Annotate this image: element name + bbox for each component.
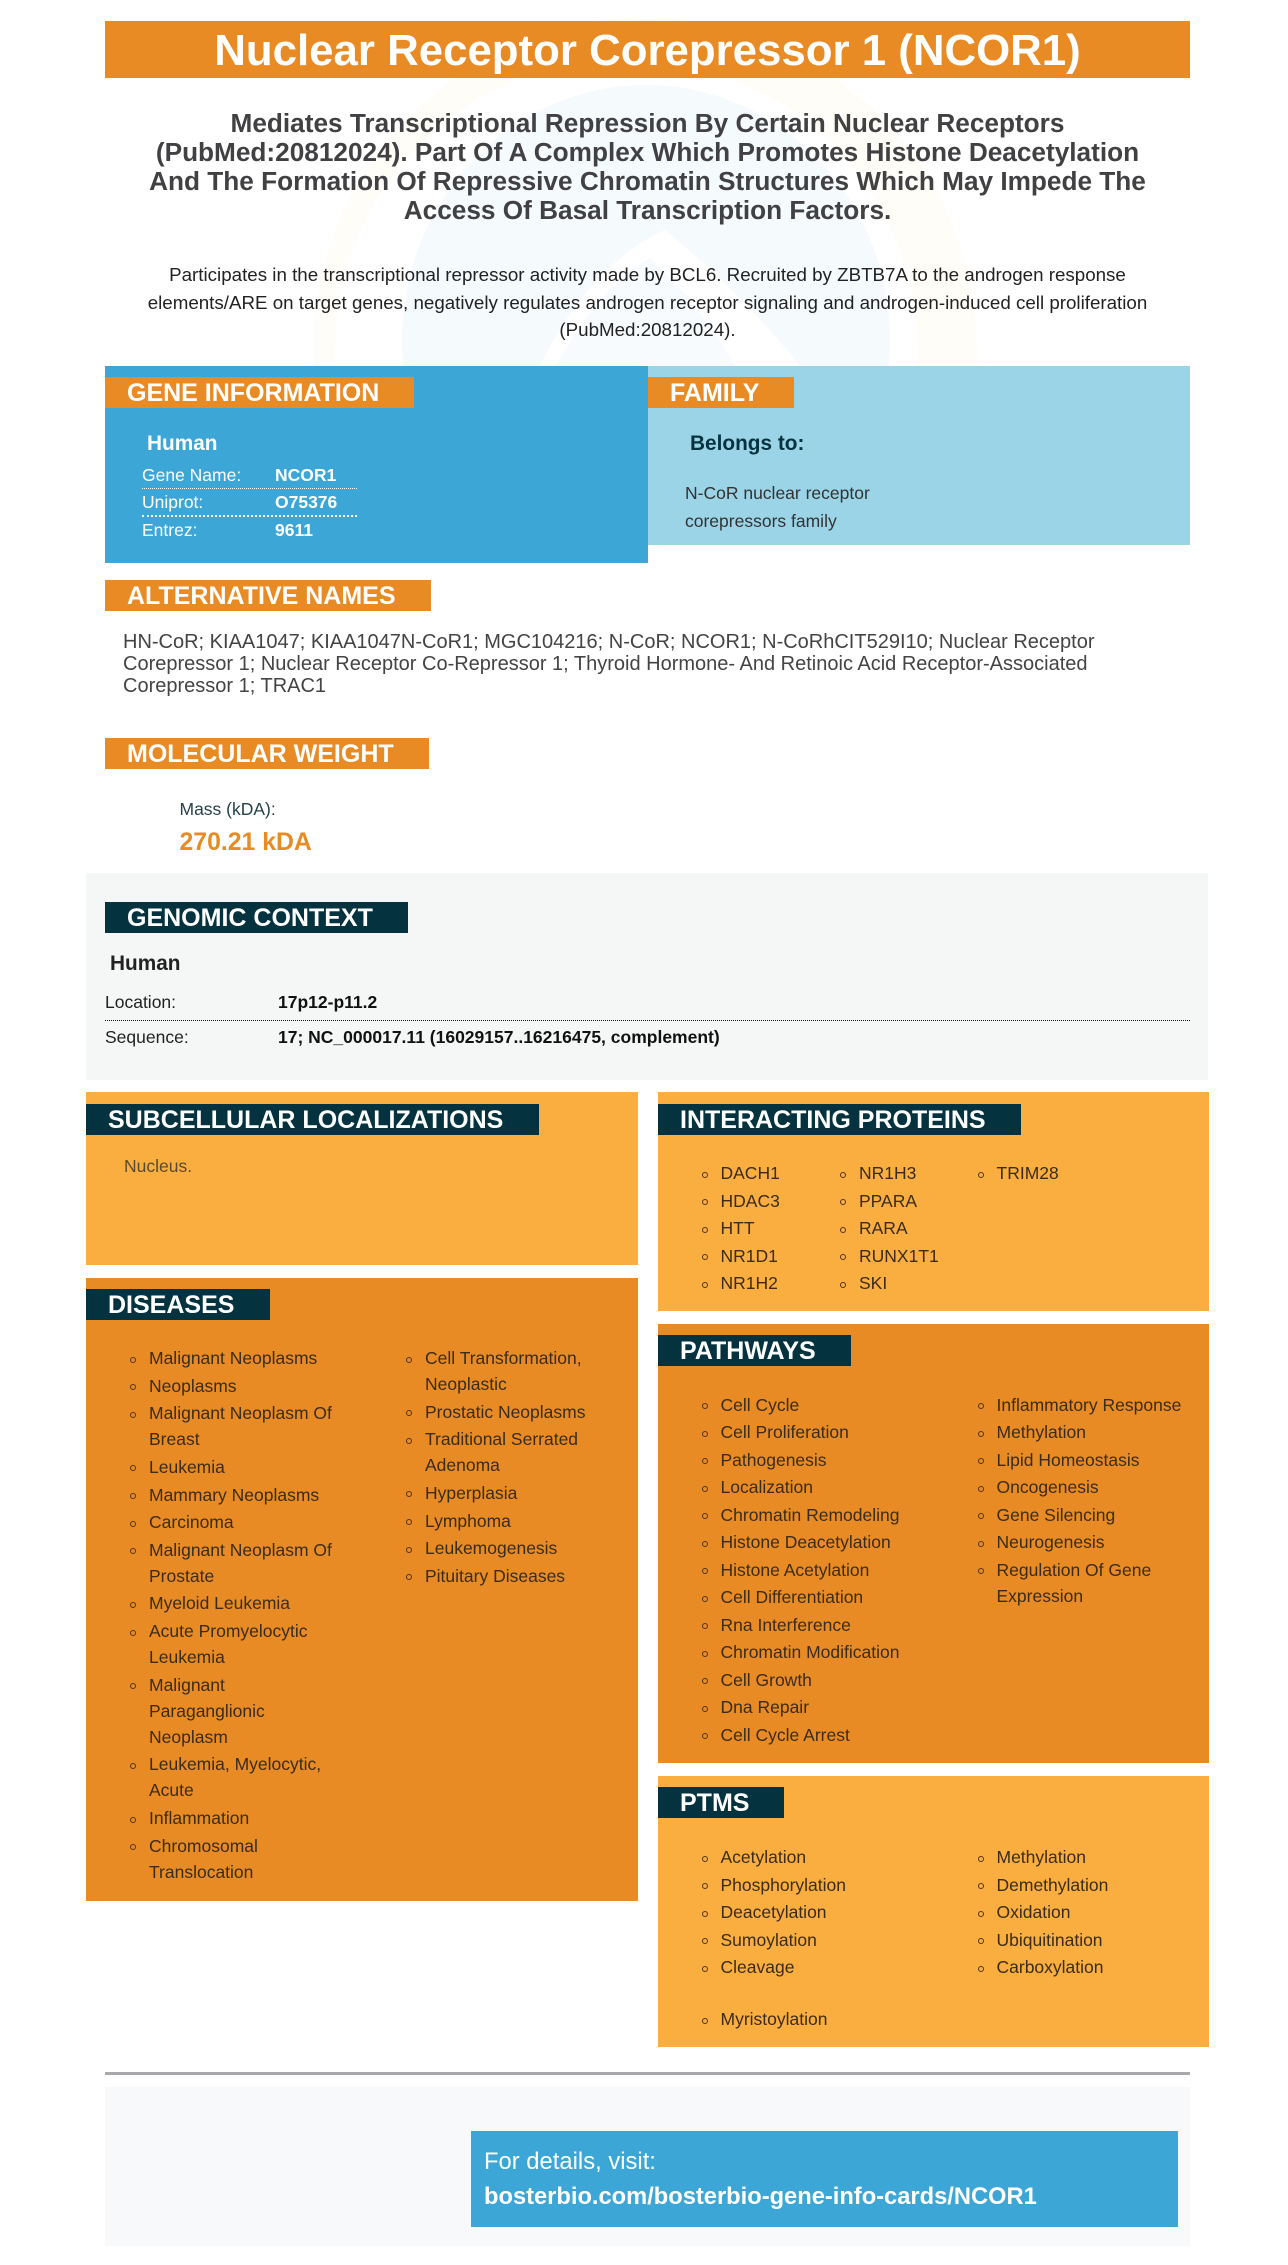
panel: pathways — [658, 1324, 1209, 1763]
list: diseases column 1: Malignant Neoplasms — [149, 1348, 317, 1368]
panel: diseases — [86, 1278, 638, 1901]
list: diseases column 1: Malignant Neoplasm Of — [149, 1540, 332, 1560]
list: ptms column 2: Oxidation — [996, 1902, 1070, 1922]
row: uniprot: O75376 — [275, 492, 337, 512]
localization text: Nucleus. — [124, 1156, 192, 1176]
species label: Human — [110, 952, 180, 975]
panel: gene information — [105, 366, 648, 563]
list: pathways column 2 — [978, 1394, 1181, 1606]
list: pathways column 2: Expression — [996, 1586, 1083, 1606]
list: diseases column 1 — [130, 1348, 332, 1882]
description: elements/ARE on target genes, negatively regulates androgen receptor signaling and androgen-induced cell proliferation — [148, 292, 1147, 313]
mass label: Mass (kDA): — [180, 799, 276, 819]
title banner: Nuclear Receptor Corepressor 1 (NCOR1) — [214, 26, 1081, 75]
list: diseases column 2: Leukemogenesis — [425, 1538, 557, 1558]
list: pathways column 1: Dna Repair — [720, 1697, 809, 1717]
list: pathways column 2: Regulation Of Gene — [996, 1560, 1151, 1580]
heading: subcellular localizations: SUBCELLULAR LOCALIZATIONS — [108, 1106, 503, 1134]
list: ptms column 1: Phosphorylation — [720, 1874, 846, 1894]
list: diseases column 2: Neoplastic — [425, 1374, 507, 1394]
subtitle: Access Of Basal Transcription Factors. — [404, 195, 891, 225]
heading: gene information: GENE INFORMATION — [127, 379, 379, 407]
callout url: bosterbio.com/bosterbio-gene-info-cards/NCOR1 — [484, 2184, 1037, 2210]
row: sequence: 17; NC_000017.11 (16029157..16216475, complement) — [278, 1027, 720, 1047]
belongs to label: Belongs to: — [690, 432, 804, 455]
heading: diseases: DISEASES — [108, 1291, 234, 1319]
list: diseases column 1: Breast — [149, 1429, 200, 1449]
heading: diseases — [86, 1289, 270, 1320]
alternative names text: HN-CoR; KIAA1047; KIAA1047N-CoR1; MGC104216; N-CoR; NCOR1; N-CoRhCIT529I10; Nuclear Receptor — [123, 631, 1094, 653]
list: proteins column 2: RARA — [859, 1218, 908, 1238]
list: proteins column 3: TRIM28 — [996, 1163, 1059, 1183]
heading: ptms — [658, 1787, 784, 1818]
row: uniprot: Uniprot: — [142, 492, 203, 512]
row: gene name: NCOR1 — [275, 465, 336, 485]
list: pathways column 1: Chromatin Modification — [720, 1642, 899, 1662]
mass value: 270.21 kDA — [180, 829, 312, 856]
description: (PubMed:20812024). — [559, 319, 736, 340]
list: ptms column 1: Cleavage — [720, 1957, 794, 1977]
callout: details link — [471, 2131, 1178, 2227]
list: proteins column 2 — [840, 1163, 939, 1293]
list: ptms column 1: Acetylation — [720, 1847, 806, 1867]
list: diseases column 1: Translocation — [149, 1862, 253, 1882]
list: ptms column 1 — [702, 1847, 846, 1977]
list: pathways column 1: Pathogenesis — [720, 1450, 827, 1470]
list: ptms column 2: Demethylation — [996, 1874, 1108, 1894]
list: pathways column 1: Cell Proliferation — [720, 1422, 849, 1442]
row: entrez: 9611 — [275, 520, 313, 540]
species label: Human — [147, 432, 217, 455]
panel: interacting proteins — [658, 1092, 1209, 1311]
list: pathways column 1: Cell Growth — [720, 1670, 812, 1690]
list: diseases column 2: Pituitary Diseases — [425, 1566, 565, 1586]
list: pathways column 2: Oncogenesis — [996, 1477, 1099, 1497]
list: diseases column 1: Acute Promyelocytic — [149, 1621, 308, 1641]
list: ptms column 2: Ubiquitination — [996, 1930, 1103, 1950]
list: diseases column 1: Paraganglionic — [149, 1701, 265, 1721]
list: ptms column 2: Methylation — [996, 1847, 1086, 1867]
list: diseases column 2: Prostatic Neoplasms — [425, 1402, 585, 1422]
list: pathways column 2: Lipid Homeostasis — [996, 1450, 1139, 1470]
row: location: Location: — [105, 992, 176, 1012]
list: ptms overflow item: Myristoylation — [720, 2009, 827, 2029]
list: proteins column 1 — [702, 1163, 780, 1293]
list: proteins column 1: NR1H2 — [720, 1273, 778, 1293]
description: Participates in the transcriptional repressor activity made by BCL6. Recruited by ZBTB7A to the androgen response — [169, 264, 1126, 285]
alternative names text: Corepressor 1; Nuclear Receptor Co-Repressor 1; Thyroid Hormone- And Retinoic Acid Receptor-Associated — [123, 653, 1088, 675]
list: diseases column 1: Myeloid Leukemia — [149, 1593, 290, 1613]
list: pathways column 1: Cell Cycle Arrest — [720, 1724, 850, 1744]
list: proteins column 1: HDAC3 — [720, 1190, 780, 1210]
heading: genomic context: GENOMIC CONTEXT — [127, 904, 373, 932]
heading: ptms: PTMS — [680, 1789, 749, 1817]
list: pathways column 1: Cell Cycle — [720, 1394, 799, 1414]
heading: family: FAMILY — [670, 379, 759, 407]
heading: pathways: PATHWAYS — [680, 1337, 816, 1365]
list: diseases column 2: Lymphoma — [425, 1511, 511, 1531]
list: ptms column 1: Deacetylation — [720, 1902, 827, 1922]
list: ptms column 2: Carboxylation — [996, 1957, 1104, 1977]
row: sequence: Sequence: — [105, 1027, 189, 1047]
heading: alternative names: ALTERNATIVE NAMES — [127, 582, 396, 610]
heading: family — [648, 377, 794, 408]
row: entrez: Entrez: — [142, 520, 197, 540]
panel: family — [648, 366, 1190, 545]
row: gene name: Gene Name: — [142, 465, 241, 485]
list: pathways column 1: Histone Deacetylation — [720, 1532, 891, 1552]
row: entrez — [142, 520, 313, 540]
description — [148, 264, 1147, 340]
list: pathways column 1: Localization — [720, 1477, 813, 1497]
list: pathways column 2: Methylation — [996, 1422, 1086, 1442]
list: pathways column 2: Gene Silencing — [996, 1504, 1115, 1524]
title banner — [105, 21, 1190, 78]
panel: footer — [105, 2087, 1190, 2246]
list: diseases column 1: Prostate — [149, 1566, 214, 1586]
list: pathways column 1: Histone Acetylation — [720, 1560, 869, 1580]
subtitle: Mediates Transcriptional Repression By Certain Nuclear Receptors — [231, 108, 1064, 138]
subtitle: (PubMed:20812024). Part Of A Complex Which Promotes Histone Deacetylation — [156, 137, 1139, 167]
panel: subcellular localizations — [86, 1092, 638, 1265]
panel: genomic context — [86, 873, 1208, 1080]
list: proteins column 2: NR1H3 — [859, 1163, 916, 1183]
list: diseases column 1: Malignant Neoplasm Of — [149, 1403, 332, 1423]
list: diseases column 2: Adenoma — [425, 1455, 500, 1475]
list: proteins column 1: HTT — [720, 1218, 755, 1238]
list: pathways column 2: Inflammatory Response — [996, 1394, 1181, 1414]
list: proteins column 2: PPARA — [859, 1190, 917, 1210]
list: ptms column 1: Sumoylation — [720, 1930, 817, 1950]
row: gene name — [142, 465, 336, 485]
list: pathways column 1: Rna Interference — [720, 1614, 851, 1634]
heading: pathways — [658, 1335, 851, 1366]
list: proteins column 2: SKI — [859, 1273, 887, 1293]
alternative names text: Corepressor 1; TRAC1 — [123, 675, 326, 697]
list: ptms column 2 — [978, 1847, 1108, 1977]
row: location — [105, 992, 377, 1012]
list: diseases column 1: Chromosomal — [149, 1836, 258, 1856]
row: uniprot — [142, 492, 337, 512]
subtitle — [149, 108, 1146, 225]
list: diseases column 1: Neoplasms — [149, 1376, 237, 1396]
list: diseases column 1: Acute — [149, 1780, 194, 1800]
list: diseases column 1: Leukemia — [149, 1647, 225, 1667]
family text: corepressors family — [685, 511, 837, 531]
list: diseases column 2: Traditional Serrated — [425, 1429, 578, 1449]
list: pathways column 1 — [702, 1394, 899, 1744]
list: diseases column 1: Malignant — [149, 1675, 225, 1695]
list: proteins column 1: DACH1 — [720, 1163, 780, 1183]
list: diseases column 1: Carcinoma — [149, 1512, 234, 1532]
list: diseases column 1: Inflammation — [149, 1808, 249, 1828]
row: location: 17p12-p11.2 — [278, 992, 377, 1012]
subtitle: And The Formation Of Repressive Chromatin Structures Which May Impede The — [149, 166, 1146, 196]
callout label: For details, visit: — [484, 2148, 656, 2175]
list: proteins column 1: NR1D1 — [720, 1246, 778, 1266]
list: diseases column 1: Neoplasm — [149, 1727, 228, 1747]
list: pathways column 1: Chromatin Remodeling — [720, 1504, 899, 1524]
family text — [685, 483, 870, 531]
heading: molecular weight: MOLECULAR WEIGHT — [127, 740, 394, 768]
list: diseases column 1: Mammary Neoplasms — [149, 1485, 319, 1505]
list: diseases column 2 — [406, 1348, 585, 1586]
list: diseases column 1: Leukemia, Myelocytic, — [149, 1754, 321, 1774]
family text: N-CoR nuclear receptor — [685, 483, 870, 503]
list: pathways column 1: Cell Differentiation — [720, 1587, 863, 1607]
list: pathways column 2: Neurogenesis — [996, 1532, 1104, 1552]
list: proteins column 2: RUNX1T1 — [859, 1246, 939, 1266]
list: diseases column 2: Hyperplasia — [425, 1483, 517, 1503]
alternative names text — [123, 631, 1094, 697]
watermark logo — [402, 85, 890, 366]
list: diseases column 2: Cell Transformation, — [425, 1348, 582, 1368]
heading: interacting proteins: INTERACTING PROTEINS — [680, 1106, 986, 1134]
list: diseases column 1: Leukemia — [149, 1457, 225, 1477]
panel: ptms — [658, 1776, 1209, 2047]
